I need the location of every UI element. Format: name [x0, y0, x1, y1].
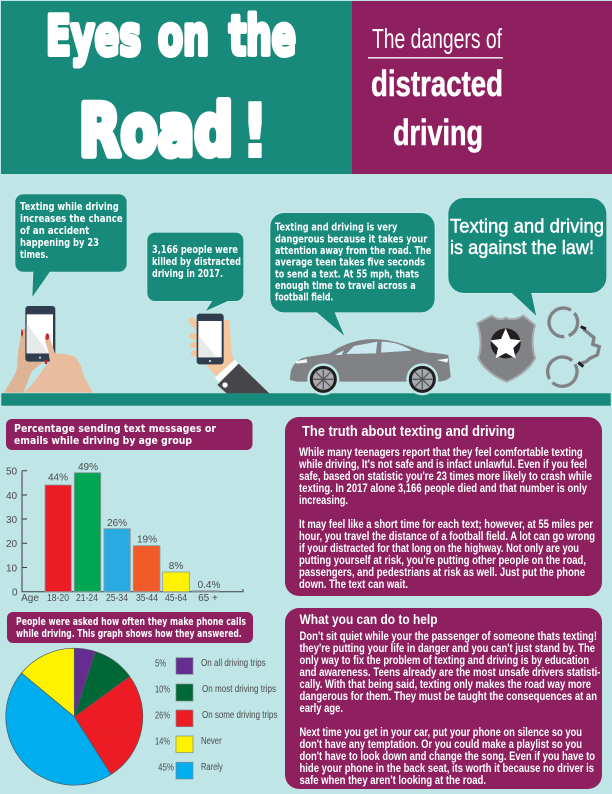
age labels: [21, 593, 218, 604]
chart heading: phone calls: while driving. This graph shows how they answered.: [16, 628, 242, 640]
panel body text: early age.: [300, 703, 343, 715]
legend row: never: Never: [201, 735, 222, 747]
y axis labels: [6, 466, 18, 598]
title line 2: Road: [79, 89, 233, 172]
speech bubble: football field: Texting and driving is very: [275, 222, 397, 234]
title line 2: !: [240, 87, 270, 175]
legend row: on some driving trips: 26%: [155, 710, 170, 722]
legend row: on some driving trips: On some driving trips: [202, 709, 277, 721]
speech bubble: 3,166 people: 3,166 people were: [152, 244, 238, 256]
y axis labels: 30: [6, 515, 18, 526]
legend row: on most driving trips: 10%: [155, 684, 170, 696]
subtitle line 1: The dangers of: [372, 23, 502, 54]
speech bubble: 3,166 people: [147, 232, 244, 312]
speech bubble: 23 times: [15, 194, 127, 298]
subtitle line 3: driving: [393, 112, 483, 153]
icon: police badge: [477, 316, 535, 382]
header: subtitle panel: [352, 1, 612, 174]
y axis labels: 0: [12, 588, 18, 598]
panel body text: down. The text can wait.: [299, 579, 408, 591]
legend row: on all driving trips: [155, 657, 266, 674]
title line 1: on: [158, 4, 209, 68]
age labels: 21-24: [76, 593, 98, 604]
value labels: 26%: [107, 518, 127, 529]
chart heading: text messages: Percentage sending text messages or: [14, 423, 217, 435]
age labels: 65 +: [198, 593, 218, 604]
bars: [45, 473, 219, 592]
pie legend: [155, 657, 277, 779]
value labels: 8%: [169, 561, 183, 572]
speech bubble: 23 times: increases the chance: [20, 213, 123, 225]
panel: the truth about texting and driving: [285, 417, 602, 596]
value labels: [48, 462, 221, 591]
icon: car: [290, 339, 451, 395]
speech bubble: against the law: is against the law!: [450, 237, 594, 259]
chart heading: text messages: emails while driving by age group: [14, 435, 192, 447]
bar chart: texting by age group: [6, 462, 243, 604]
legend row: never: 14%: [155, 736, 170, 748]
subtitle line 2: distracted: [371, 63, 503, 104]
chart heading: text messages: [6, 419, 252, 450]
title line 1: Eyes: [46, 4, 141, 68]
age labels: 45-64: [165, 593, 187, 604]
speech bubble: against the law: Texting and driving: [450, 215, 604, 237]
legend row: rarely: Rarely: [201, 761, 223, 773]
speech bubble: football field: to send a text. At 55 mph, thats: [275, 268, 419, 280]
legend row: never: [155, 735, 222, 753]
speech bubble: 23 times: Texting while driving: [20, 201, 119, 213]
value labels: 0.4%: [198, 580, 221, 591]
age labels: 18-20: [47, 593, 69, 604]
age labels: 35-44: [136, 593, 158, 604]
speech bubble: against the law: [448, 198, 607, 317]
speech bubble: 23 times: times.: [20, 249, 48, 261]
speech bubble: 23 times: happening by 23: [20, 237, 99, 249]
speech bubble: football field: football field.: [275, 291, 333, 303]
chart heading: phone calls: People were asked how often they make phone calls: [16, 616, 246, 628]
panel body text: increasing.: [299, 495, 348, 507]
y axis labels: 40: [6, 491, 18, 502]
road band: [1, 393, 611, 406]
y axis labels: 20: [6, 539, 18, 550]
title line 1: [46, 4, 296, 68]
icon: hands texting on phone: [4, 306, 93, 393]
value labels: 19%: [137, 535, 157, 546]
panel body text: safe when they aren't looking at the road.: [300, 775, 486, 787]
speech bubble: football field: enough time to travel across a: [275, 280, 416, 292]
legend row: on most driving trips: [155, 683, 276, 701]
speech bubble: 3,166 people: driving in 2017.: [152, 268, 223, 280]
speech bubble: football field: dangerous because it takes your: [275, 233, 428, 245]
title line 1: the: [229, 4, 296, 68]
legend row: rarely: 45%: [158, 762, 174, 774]
icon: handcuffs: [542, 302, 599, 392]
icon: hand holding phone with suit sleeve: [192, 314, 269, 393]
value labels: 49%: [78, 462, 98, 473]
value labels: 44%: [48, 473, 68, 484]
speech bubble: 23 times: of an accident: [20, 225, 89, 237]
legend row: on all driving trips: On all driving trips: [201, 657, 266, 669]
legend row: rarely: [158, 761, 223, 779]
y axis labels: 50: [6, 466, 18, 478]
legend row: on all driving trips: 5%: [155, 658, 166, 670]
y axis labels: 10: [6, 563, 18, 574]
chart heading: phone calls: [7, 612, 253, 643]
header: title panel: [1, 1, 352, 175]
panel heading: What you can do to help: [300, 612, 438, 627]
speech bubble: 3,166 people: killed by distracted: [152, 256, 241, 268]
legend row: on most driving trips: On most driving trips: [202, 683, 276, 695]
speech bubble: football field: [270, 213, 435, 337]
legend row: on some driving trips: [155, 709, 277, 727]
speech bubble: football field: average teen takes five seconds: [275, 257, 425, 269]
pie chart: phone call frequency: [6, 648, 143, 785]
speech bubble: football field: attention away from the road. The: [275, 245, 431, 257]
panel body text: [300, 631, 601, 787]
panel heading: The truth about texting and driving: [302, 424, 515, 440]
age labels: 25-34: [106, 593, 128, 604]
panel: what you can do to help: [285, 608, 602, 789]
age labels: Age: [21, 593, 39, 604]
panel body text: [298, 447, 595, 591]
